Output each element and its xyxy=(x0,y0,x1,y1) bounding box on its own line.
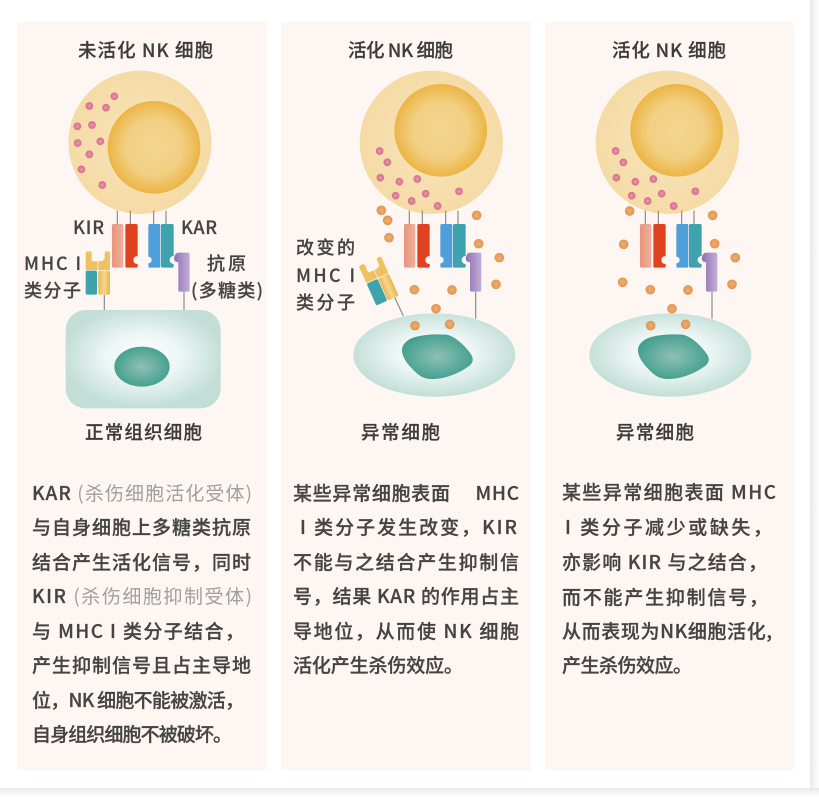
label: 改变的 MHC I 类分子: 改变的 xyxy=(296,234,355,260)
panel: 活化 NK 细胞 (MHC I lost) xyxy=(545,22,794,770)
label: KIR: KIR xyxy=(73,214,104,240)
text block: explanation 2: 号，结果 KAR 的作用占主 xyxy=(293,582,519,609)
caption: 异常细胞: 异常细胞 xyxy=(616,419,694,445)
diagram: altered MHC I interaction xyxy=(353,71,515,397)
panel: 活化 NK 细胞 (altered MHC I) xyxy=(281,22,531,770)
antigen xyxy=(702,253,717,319)
text block: explanation 1: 产生抑制信号且占主导地 xyxy=(32,651,251,678)
text block: explanation 2: 某些异常细胞表面 MHC xyxy=(293,479,519,506)
MHC I molecule xyxy=(86,251,110,310)
KIR and KAR receptors xyxy=(112,211,178,268)
text block: explanation 1: 结合产生活化信号，同时 xyxy=(32,548,251,575)
label: MHC I 类分子: MHC I xyxy=(24,250,81,276)
text block: explanation 2: 导地位，从而使 NK 细胞 xyxy=(293,617,519,644)
diagram: normal tissue cell interaction xyxy=(66,71,221,408)
text block: explanation 3: 产生杀伤效应。 xyxy=(562,651,692,678)
KIR and KAR receptors xyxy=(640,211,706,268)
label: MHC I 类分子 xyxy=(24,250,81,303)
caption: 异常细胞: 异常细胞 xyxy=(361,419,440,445)
diagram: missing MHC I interaction xyxy=(589,71,751,397)
abnormal cell xyxy=(589,313,751,397)
antigen xyxy=(466,253,481,319)
text block: explanation 1: KIR (杀伤细胞抑制受体) xyxy=(32,582,252,609)
label: 抗原（多糖类）: (多糖类) xyxy=(191,277,263,303)
text block: explanation 1: 与 MHC I 类分子结合， xyxy=(32,617,244,644)
abnormal cell xyxy=(353,313,515,397)
heading: 未活化 NK 细胞: 未活化 NK 细胞 xyxy=(78,37,213,63)
text block: explanation 3: 某些异常细胞表面 MHC xyxy=(562,478,776,505)
text block: explanation 1: KAR (杀伤细胞活化受体) xyxy=(32,479,252,506)
cytotoxic granules released xyxy=(376,205,504,330)
text block: explanation 3 xyxy=(562,478,776,678)
text block: explanation 1: 位，NK 细胞不能被激活， xyxy=(32,686,244,713)
caption: 正常组织细胞: 正常组织细胞 xyxy=(85,419,202,445)
text block: explanation 3: 亦影响 KIR 与之结合， xyxy=(562,548,767,575)
NK cell xyxy=(360,71,503,214)
label: KAR: KAR xyxy=(181,214,217,240)
label: 改变的 MHC I 类分子 xyxy=(296,234,355,315)
normal tissue cell xyxy=(66,310,221,408)
heading: 活化 NK 细胞: 活化 NK 细胞 xyxy=(612,37,726,63)
label: 改变的 MHC I 类分子: MHC I xyxy=(296,262,355,288)
text block: explanation 2 xyxy=(293,479,519,678)
text block: explanation 2: 不能与之结合产生抑制信 xyxy=(293,548,519,575)
altered MHC I molecule xyxy=(359,256,403,316)
antigen xyxy=(174,253,190,310)
NK cell xyxy=(596,71,739,214)
panel: 未活化 NK 细胞 xyxy=(17,22,267,770)
label: 抗原（多糖类） xyxy=(191,250,263,303)
text block: explanation 2: I 类分子发生改变，KIR xyxy=(300,513,517,540)
text block: explanation 1: 与自身细胞上多糖类抗原 xyxy=(32,513,251,540)
text block: explanation 2: 活化产生杀伤效应。 xyxy=(293,651,463,678)
KIR and KAR receptors xyxy=(404,211,470,268)
cytotoxic granules released xyxy=(618,206,740,330)
text block: explanation 3: 而不能产生抑制信号， xyxy=(562,583,768,610)
heading: 活化 NK 细胞: 活化 NK 细胞 xyxy=(348,37,453,63)
text block: explanation 3: I 类分子减少或缺失， xyxy=(565,513,772,540)
label: 改变的 MHC I 类分子: 类分子 xyxy=(296,289,355,315)
text block: explanation 1 xyxy=(32,479,252,747)
text block: explanation 3: 从而表现为NK细胞活化, xyxy=(562,617,772,644)
NK cell xyxy=(68,71,212,214)
label: 抗原（多糖类）: 抗原 xyxy=(207,250,246,276)
text block: explanation 1: 自身组织细胞不被破坏。 xyxy=(32,720,232,747)
label: MHC I 类分子: 类分子 xyxy=(24,277,81,303)
